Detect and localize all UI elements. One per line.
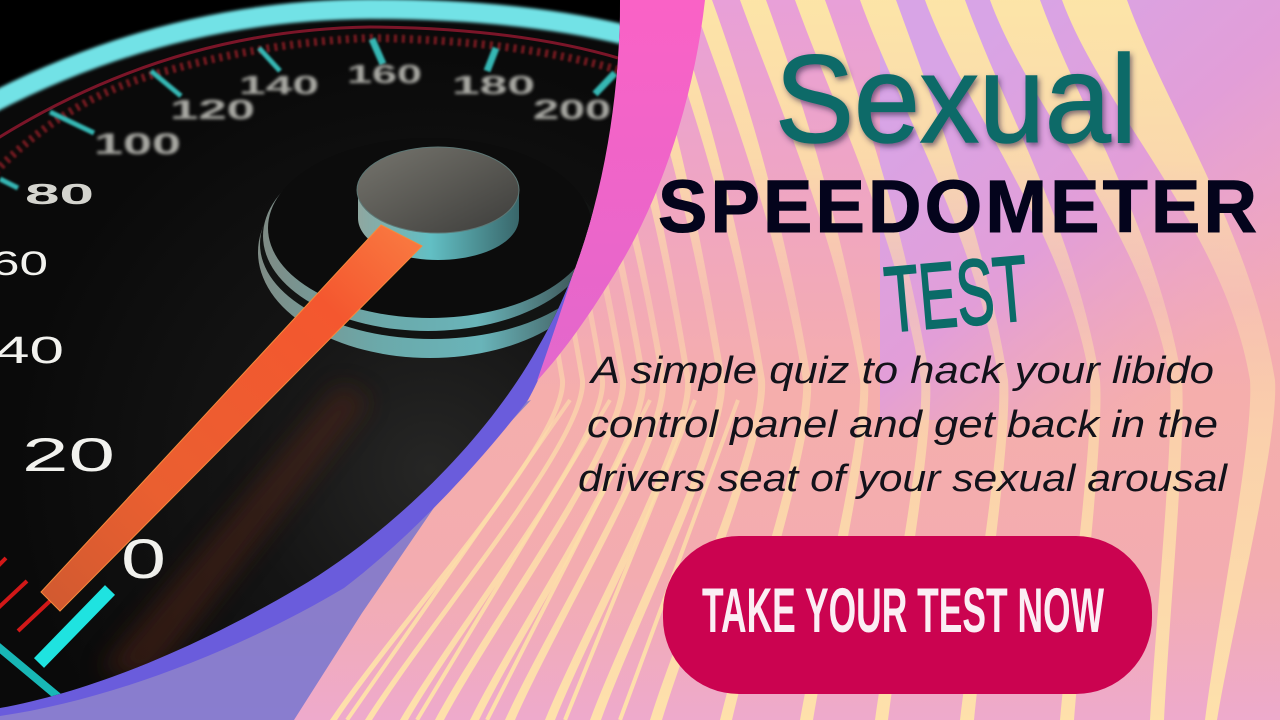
cyan outer ring (0, 9, 630, 104)
red ticks (0, 558, 50, 631)
blurred speed numbers: 100 (94, 128, 181, 161)
blurred speed numbers: 180 (452, 70, 535, 100)
zero tick (39, 590, 110, 663)
sharp speed numbers: 80 (25, 179, 94, 211)
description text (578, 350, 1229, 500)
sharp speed numbers: 20 (22, 428, 115, 481)
blurred speed numbers: 200 (533, 94, 611, 125)
needle (41, 225, 422, 611)
description text: control panel and get back in the (587, 404, 1218, 446)
lower cyan tick (0, 645, 62, 700)
speedometer photo panel (0, 0, 640, 720)
red scale ring (0, 27, 625, 140)
blurred speed numbers: 120 (170, 94, 255, 125)
button: take your test now (663, 536, 1152, 694)
blurred speed numbers: 160 (347, 59, 422, 89)
hub base (258, 194, 593, 358)
solid blue arc (0, 220, 590, 716)
translucent blue arc (0, 400, 531, 720)
sharp speed numbers (0, 179, 166, 590)
sharp speed numbers: 0 (121, 527, 166, 590)
description text: A simple quiz to hack your libido (589, 350, 1214, 392)
hub cap (357, 147, 519, 260)
top black corner (0, 0, 620, 86)
title: SPEEDOMETER: SPEEDOMETER (658, 165, 1257, 248)
pink arc (537, 0, 705, 381)
blurred speed numbers: 140 (239, 70, 319, 100)
needle reflection (100, 385, 370, 680)
title: TEST: TEST (881, 236, 1032, 352)
title: Sexual: Sexual (775, 31, 1137, 169)
cyan scale ticks (0, 39, 615, 188)
blurred speed numbers (94, 59, 611, 161)
description text: drivers seat of your sexual arousal (578, 458, 1229, 500)
red scale dashes (0, 38, 625, 172)
